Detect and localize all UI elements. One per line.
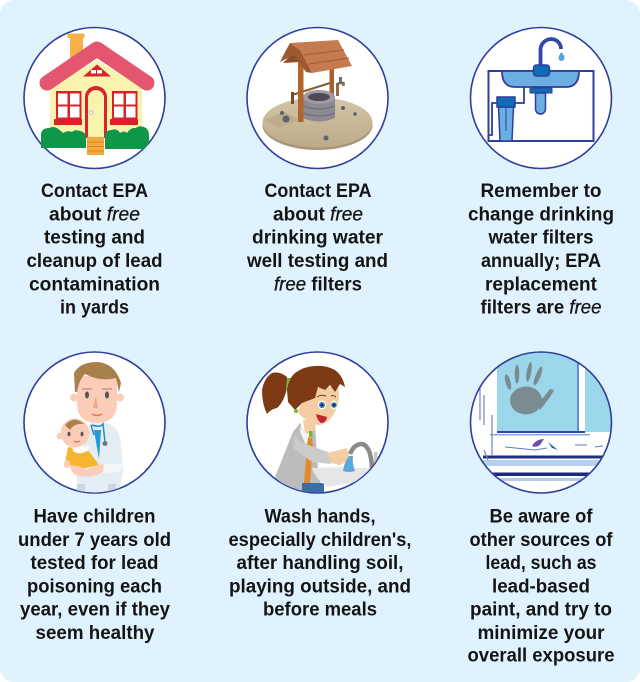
text: yards: contamination	[29, 274, 160, 295]
text: other sources	[468, 506, 614, 667]
text: well testing	[246, 181, 388, 295]
text: other sources: minimize your	[478, 623, 605, 644]
text: filters: filters are free	[480, 298, 602, 318]
text: test children: year, even if they	[20, 600, 170, 621]
text: test children: poisoning each	[27, 576, 162, 597]
text: filters: replacement	[485, 274, 598, 295]
text: other sources: overall exposure	[468, 646, 614, 667]
text: other sources: lead, such as	[486, 553, 596, 574]
text: yards: Contact EPA	[41, 181, 148, 202]
text: well testing: drinking water	[252, 228, 384, 249]
text: test children	[18, 506, 171, 644]
text: filters	[468, 181, 614, 318]
text: filters: Remember to	[480, 181, 602, 202]
text: yards: about free	[49, 204, 140, 225]
text: filters: change drinking	[468, 204, 614, 225]
icon: handprint on peeling window	[470, 350, 615, 493]
text: other sources: other sources of	[470, 530, 613, 551]
text: test children: seem healthy	[36, 623, 155, 644]
icon: house	[24, 28, 165, 168]
text: wash hands: especially children's,	[228, 530, 412, 551]
text: other sources: paint, and try to	[470, 600, 612, 621]
text: yards	[26, 181, 162, 318]
text: yards: cleanup of lead	[26, 251, 162, 272]
text: filters: annually; EPA	[481, 251, 601, 272]
text: yards: in yards	[60, 298, 129, 318]
icon: doctor with baby	[24, 352, 165, 500]
text: wash hands: Wash hands,	[264, 506, 376, 528]
text: wash hands	[228, 506, 412, 621]
text: test children: Have children	[34, 506, 156, 528]
text: test children: under 7 years old	[18, 530, 171, 551]
text: wash hands: after handling soil,	[236, 553, 404, 574]
text: test children: tested for lead	[30, 553, 158, 574]
icon: water well	[247, 28, 388, 168]
text: well testing: about free	[273, 204, 363, 225]
text: filters: water filters	[488, 228, 594, 249]
text: other sources: Be aware of	[490, 506, 593, 528]
text: well testing: well testing and	[246, 251, 388, 272]
handprint	[504, 362, 554, 414]
text: yards: testing and	[44, 228, 145, 249]
icon: child washing hands	[247, 352, 388, 495]
text: wash hands: before meals	[263, 600, 377, 621]
text: well testing: Contact EPA	[264, 181, 372, 202]
text: other sources: lead-based	[492, 576, 590, 597]
icon: sink with filter	[470, 28, 612, 168]
text: wash hands: playing outside, and	[229, 576, 411, 597]
text: well testing: free filters	[274, 274, 362, 295]
